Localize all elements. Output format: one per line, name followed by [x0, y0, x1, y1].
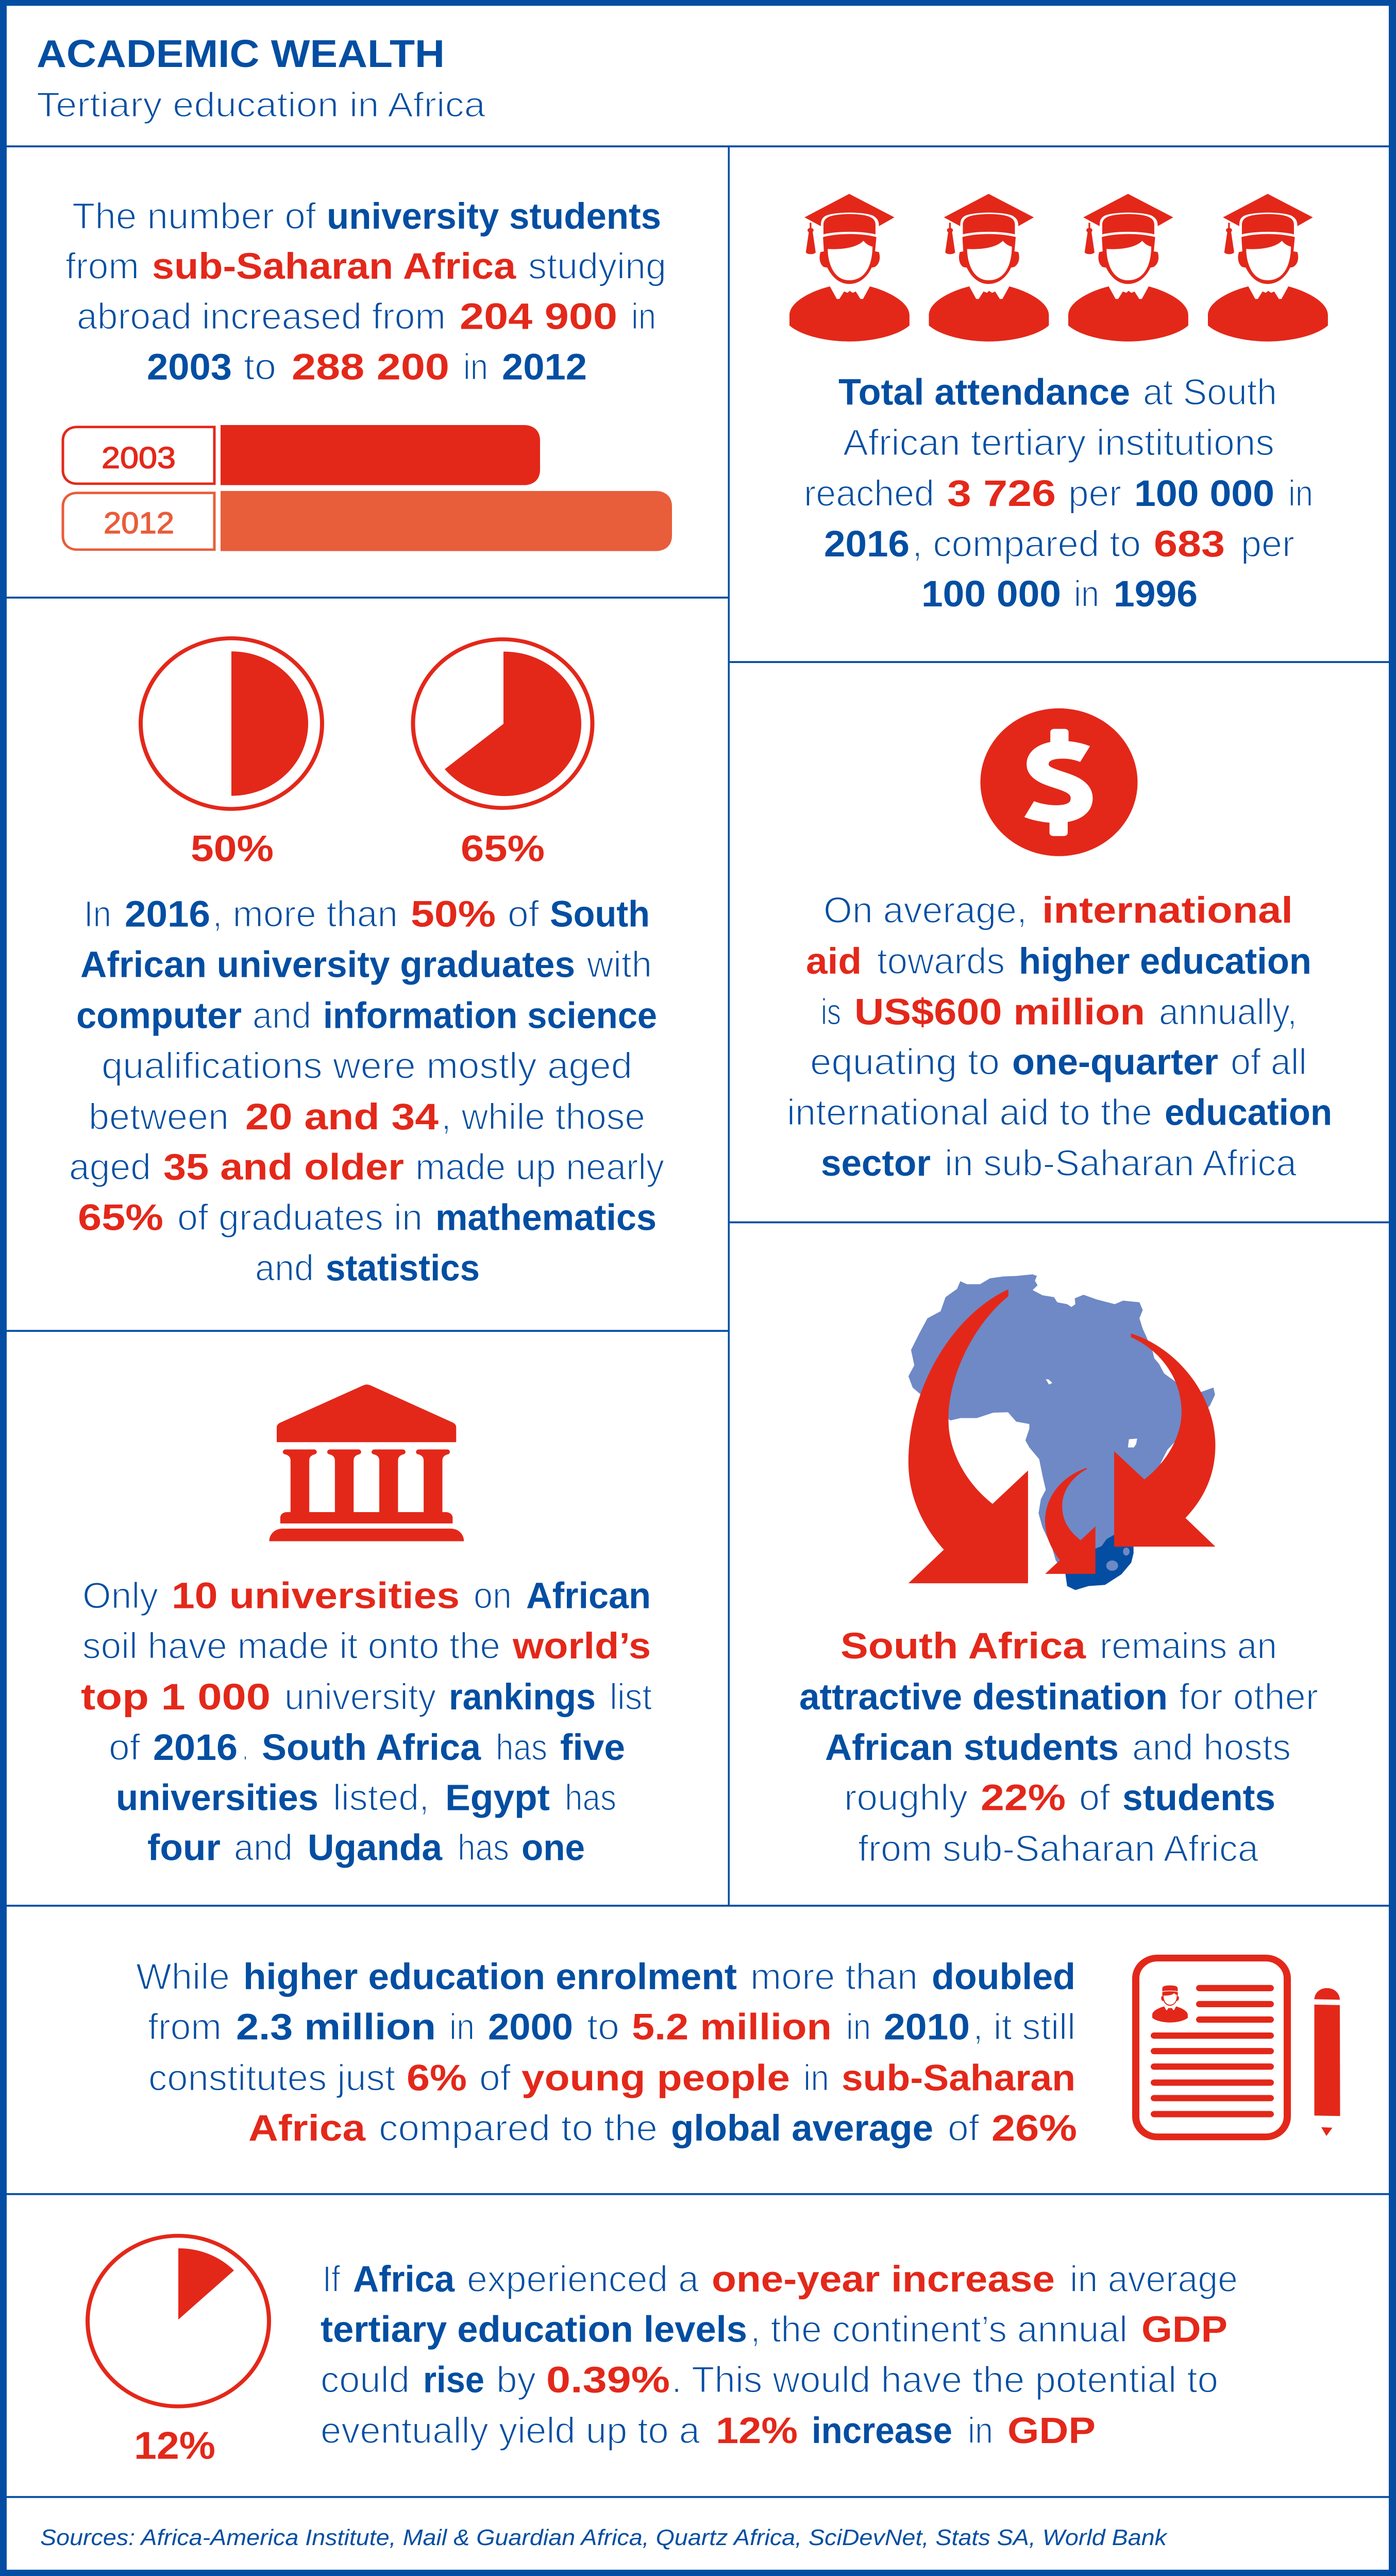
text block: GDP: could: [321, 2359, 410, 2400]
text block: students abroad: 2012: [502, 346, 587, 387]
text block: enrolment: of: [948, 2107, 979, 2149]
text block: rankings: five: [560, 1726, 625, 1768]
text block: attendance: African tertiary institutions: [843, 421, 1274, 463]
text block: enrolment: doubled: [932, 1956, 1075, 1997]
text block: aid: international: [1042, 889, 1293, 931]
arrow: centre: [1045, 1468, 1096, 1574]
text block: aid: On average,: [823, 889, 1027, 931]
text block: GDP: in average: [1070, 2258, 1238, 2299]
text block: aid: of all: [1231, 1041, 1307, 1082]
text block: attendance: per: [1068, 472, 1121, 514]
text block: students abroad: studying: [528, 245, 666, 286]
panel: header: [37, 32, 485, 124]
text block: enrolment: more than: [750, 1956, 918, 1997]
pie chart: 65%: [413, 639, 593, 808]
text block: graduates: African university graduates: [80, 944, 575, 985]
text block: enrolment: in: [449, 2006, 475, 2047]
text block: rankings: on: [474, 1574, 512, 1616]
text block: destination: remains an: [1100, 1625, 1277, 1667]
text block: students abroad: 288 200: [292, 346, 449, 387]
bar: 2012: [221, 491, 672, 551]
text block: enrolment: to: [587, 2006, 619, 2047]
icon: graduate 3: [1068, 194, 1188, 342]
text block: graduates: with: [586, 944, 652, 985]
text block: rankings: top 1 000: [81, 1676, 271, 1717]
text block: destination: [799, 1625, 1318, 1869]
text block: attendance: in: [1074, 573, 1099, 614]
text block: destination: for other: [1179, 1676, 1318, 1717]
map: Africa landmass: [909, 1274, 1215, 1590]
text block: rankings: 2016: [153, 1726, 238, 1768]
text block: enrolment: higher education enrolment: [243, 1956, 737, 1997]
text block: destination: South Africa: [840, 1625, 1086, 1667]
panel: international aid: [787, 708, 1332, 1184]
text block: GDP: one-year increase: [712, 2258, 1055, 2299]
text block: graduates: [69, 893, 664, 1289]
text block: students abroad: sub-Saharan Africa: [152, 245, 516, 286]
text block: GDP: , the continent’s annual: [750, 2309, 1128, 2350]
arrow: right: [1114, 1333, 1215, 1547]
panel: GDP: [88, 2236, 1238, 2467]
text block: aid: higher education: [1019, 940, 1311, 981]
pie chart: 12%: [88, 2236, 269, 2406]
icon: pencil: [1314, 1988, 1340, 2136]
text block: aid: [787, 889, 1332, 1184]
text block: attendance: per: [1241, 523, 1294, 564]
text block: graduates: aged: [69, 1146, 151, 1188]
text block: aid: in sub-Saharan Africa: [945, 1142, 1297, 1184]
label: 65%: 65%: [461, 828, 545, 869]
label: 12%: 12%: [134, 2424, 215, 2467]
text block: GDP: increase: [812, 2410, 952, 2451]
text block: graduates: South: [550, 893, 650, 935]
text block: enrolment: from: [148, 2006, 222, 2047]
text block: GDP: GDP: [1007, 2410, 1096, 2451]
text block: destination: of: [1079, 1777, 1110, 1818]
text block: GDP: by: [496, 2359, 536, 2400]
text block: students abroad: in: [463, 346, 488, 387]
panel: enrolment: [136, 1956, 1340, 2149]
text block: graduates: statistics: [326, 1247, 480, 1289]
text block: graduates: , more than: [212, 893, 398, 935]
text block: graduates: of graduates in: [177, 1197, 423, 1238]
text block: destination: and hosts: [1132, 1726, 1291, 1768]
text block: GDP: rise: [423, 2359, 484, 2400]
text block: enrolment: 6%: [407, 2057, 467, 2098]
map: Africa with inbound arrows: [909, 1274, 1215, 1590]
text block: enrolment: constitutes just: [148, 2057, 395, 2098]
text block: enrolment: in: [803, 2057, 829, 2098]
text block: students abroad: abroad increased from: [77, 296, 446, 337]
text block: GDP: [321, 2258, 1238, 2451]
bar label: 2003: [63, 427, 214, 484]
text block: attendance: , compared to: [912, 523, 1141, 564]
text block: rankings: soil have made it onto the: [82, 1625, 500, 1667]
text block: attendance: at South: [1143, 371, 1277, 413]
text block: graduates: 50%: [411, 893, 496, 935]
text block: rankings: world’s: [512, 1625, 651, 1667]
text block: students abroad: [65, 195, 666, 387]
text block: students abroad: 204 900: [460, 296, 617, 337]
text block: rankings: [81, 1574, 652, 1868]
text block: rankings: Uganda: [308, 1827, 443, 1868]
bar label: 2012: [63, 493, 214, 550]
text block: destination: attractive destination: [799, 1676, 1168, 1717]
text block: graduates: 20 and 34: [245, 1096, 439, 1137]
text block: GDP: experienced a: [467, 2258, 699, 2299]
text block: rankings: listed,: [333, 1777, 429, 1818]
text block: destination: 22%: [981, 1777, 1066, 1818]
text block: graduates: In: [84, 893, 111, 935]
text block: rankings: of: [109, 1726, 140, 1768]
pie chart: 50%: [141, 638, 322, 809]
text block: attendance: 100 000: [1134, 472, 1274, 514]
text block: students abroad: in: [631, 296, 656, 337]
text block: enrolment: 26%: [991, 2107, 1077, 2149]
icon: university building: [269, 1384, 464, 1541]
panel: university rankings: [81, 1384, 652, 1868]
text block: attendance: 2016: [824, 523, 910, 564]
icon: enrolment form: [1136, 1958, 1287, 2137]
text block: aid: annually,: [1159, 991, 1297, 1032]
text block: enrolment: compared to the: [379, 2107, 658, 2149]
text block: rankings: and: [234, 1827, 293, 1868]
text block: enrolment: , it still: [973, 2006, 1075, 2047]
text block: graduates: mathematics: [435, 1197, 657, 1238]
text block: students abroad: university students: [327, 195, 661, 237]
text block: graduates: 35 and older: [163, 1146, 404, 1188]
text block: aid: US$600 million: [854, 991, 1145, 1032]
text block: rankings: has: [458, 1827, 509, 1868]
text block: attendance: [804, 371, 1313, 614]
text block: rankings: South Africa: [262, 1726, 481, 1768]
map: South Africa: [1059, 1534, 1134, 1590]
bar: 2003: [221, 425, 540, 485]
text block: graduates: information science: [323, 994, 657, 1036]
text block: destination: roughly: [844, 1777, 968, 1818]
text block: rankings: four: [147, 1827, 221, 1868]
text block: enrolment: young people: [522, 2057, 790, 2098]
text block: enrolment: 5.2 million: [632, 2006, 832, 2047]
icon: graduate 4: [1208, 194, 1328, 342]
text block: graduates: and: [255, 1247, 314, 1289]
text block: GDP: 12%: [716, 2410, 798, 2451]
map: Swaziland: [1123, 1548, 1130, 1555]
text block: attendance: in: [1288, 472, 1313, 514]
text block: students abroad: The number of: [72, 195, 316, 237]
text block: rankings: Egypt: [445, 1777, 550, 1818]
text block: attendance: 683: [1154, 523, 1225, 564]
text block: students abroad: to: [244, 346, 276, 387]
text block: GDP: . This would have the potential to: [671, 2359, 1218, 2400]
panel: South Africa destination: [799, 1274, 1318, 1869]
text block: attendance: 1996: [1114, 573, 1198, 614]
text block: rankings: has: [565, 1777, 616, 1818]
text block: aid: one-quarter: [1012, 1041, 1218, 1082]
text block: aid: equating to: [810, 1041, 1000, 1082]
text block: aid: education: [1165, 1092, 1332, 1133]
text block: enrolment: 2000: [488, 2006, 573, 2047]
text block: attendance: Total attendance: [838, 371, 1130, 413]
text block: destination: from sub-Saharan Africa: [858, 1827, 1259, 1869]
text block: enrolment: 2010: [884, 2006, 970, 2047]
text block: rankings: list: [610, 1676, 652, 1717]
subtitle: Tertiary education in Africa: [37, 86, 485, 124]
text block: enrolment: While: [136, 1956, 230, 1997]
text block: attendance: 3 726: [947, 472, 1056, 514]
text block: rankings: one: [522, 1827, 585, 1868]
text block: GDP: in: [968, 2410, 993, 2451]
text block: rankings: .: [243, 1726, 247, 1768]
title: ACADEMIC WEALTH: [37, 32, 445, 75]
text block: students abroad: 2003: [147, 346, 232, 387]
map: Lesotho: [1106, 1561, 1118, 1571]
text block: graduates: 65%: [78, 1197, 163, 1238]
text block: graduates: made up nearly: [415, 1146, 664, 1188]
text block: GDP: If: [323, 2258, 340, 2299]
text block: enrolment: [136, 1956, 1077, 2149]
text block: aid: sector: [821, 1142, 931, 1184]
panel: graduates by age: [69, 638, 664, 1289]
text block: rankings: African: [526, 1574, 651, 1616]
text block: GDP: 0.39%: [546, 2359, 670, 2400]
bar label: 2012: 2012: [104, 506, 174, 539]
text block: enrolment: sub-Saharan: [842, 2057, 1075, 2098]
text block: aid: is: [821, 991, 841, 1032]
text block: aid: aid: [806, 940, 862, 981]
icon: graduate 1: [789, 194, 910, 342]
text block: graduates: , while those: [441, 1096, 645, 1137]
text block: GDP: Africa: [353, 2258, 455, 2299]
icon: dollar coin: [980, 708, 1138, 856]
text block: rankings: 10 universities: [172, 1574, 460, 1616]
text block: destination: African students: [825, 1726, 1119, 1768]
text block: rankings: has: [496, 1726, 547, 1768]
text block: graduates: 2016: [125, 893, 210, 935]
text block: aid: towards: [877, 940, 1005, 981]
bar chart: 2003 vs 2012: [63, 425, 672, 551]
label: 50%: 50%: [191, 828, 274, 869]
text block: graduates: of: [508, 893, 539, 935]
text block: enrolment: in: [846, 2006, 871, 2047]
text block: attendance: reached: [804, 472, 934, 514]
arrow: left: [909, 1290, 1028, 1583]
text block: rankings: rankings: [449, 1676, 596, 1717]
text block: enrolment: of: [479, 2057, 511, 2098]
panel: students abroad: [63, 195, 672, 551]
text block: graduates: computer: [76, 994, 242, 1036]
bar label: 2003: 2003: [102, 441, 176, 474]
text block: GDP: eventually yield up to a: [321, 2410, 700, 2451]
text block: enrolment: Africa: [248, 2107, 366, 2149]
text block: rankings: universities: [116, 1777, 318, 1818]
text block: attendance: 100 000: [921, 573, 1061, 614]
text block: enrolment: global average: [671, 2107, 933, 2149]
text block: rankings: university: [284, 1676, 436, 1717]
text block: enrolment: 2.3 million: [236, 2006, 436, 2047]
text block: students abroad: from: [65, 245, 139, 286]
icon: graduate 2: [929, 194, 1049, 342]
text block: graduates: and: [253, 994, 311, 1036]
text block: destination: students: [1122, 1777, 1275, 1818]
text block: rankings: Only: [82, 1574, 158, 1616]
text block: GDP: tertiary education levels: [321, 2309, 747, 2350]
text block: GDP: GDP: [1141, 2309, 1227, 2350]
text block: graduates: qualifications were mostly aged: [102, 1045, 632, 1087]
sources footer: Sources: Africa-America Institute, Mail & Guardian Africa, Quartz Africa, SciDevNet, Stats SA, World Bank: [40, 2526, 1168, 2550]
text block: aid: international aid to the: [787, 1092, 1152, 1133]
text block: graduates: between: [89, 1096, 229, 1137]
panel: total attendance: [789, 194, 1328, 614]
